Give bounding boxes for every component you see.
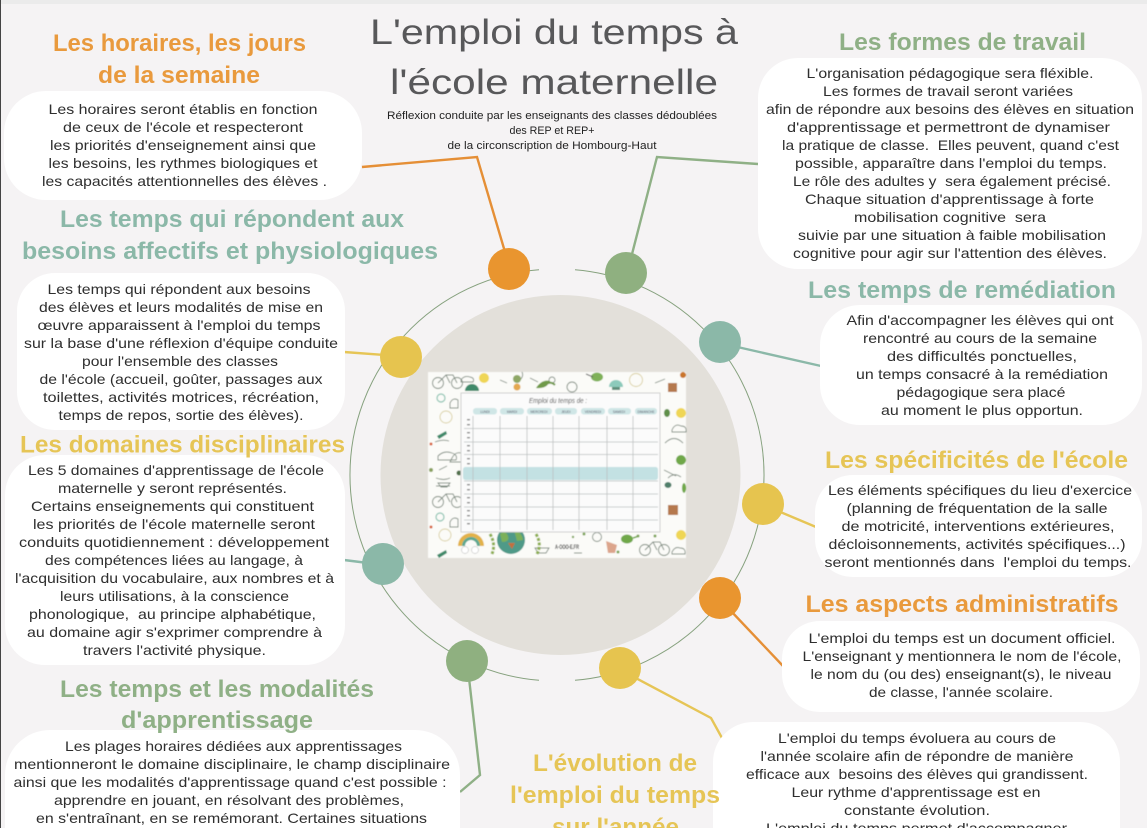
card: domaines (5, 455, 345, 665)
title (370, 13, 739, 102)
text: formes: Le rôle des adultes y sera également précisé. (793, 173, 1111, 189)
heading: domaines: Les domaines disciplinaires (20, 432, 345, 458)
text: domaines (15, 462, 334, 658)
node: teal right (699, 321, 741, 363)
text: formes: possible, apparaître dans l'emploi du temps. (795, 155, 1107, 171)
panel: remédiation (808, 277, 1142, 425)
panel: temps et modalités d'apprentissage (5, 676, 460, 828)
card: besoins (17, 273, 345, 430)
text: remédiation (846, 312, 1114, 418)
text: administratifs: L'emploi du temps est un document officiel. (808, 630, 1116, 646)
ring around the circle (350, 270, 764, 680)
picture: blank timetable: JEUDI (561, 410, 571, 414)
text: horaires: les priorités d'enseignement ainsi que (50, 137, 316, 153)
text: domaines: l'acquisition du vocabulaire, aux nombres et à (15, 570, 334, 586)
text: spécificités: (planning de fréquentation de la salle (846, 500, 1108, 516)
heading: besoins: besoins affectifs et physiologiques (22, 238, 438, 265)
connector: horaires (362, 157, 505, 252)
node: green top (605, 252, 647, 294)
text: évolution: constante évolution. (844, 802, 990, 818)
picture: blank timetable: A-OOO-E.FR (555, 545, 579, 551)
text: domaines: Les 5 domaines d'apprentissage de l'école (28, 462, 324, 478)
picture: blank timetable: SAMEDI (613, 410, 625, 414)
node: orange bottom right (699, 577, 741, 619)
text: horaires: les capacités attentionnelles des élèves . (42, 173, 327, 189)
heading: horaires: Les horaires, les jours (53, 30, 306, 57)
connector: évolution (632, 676, 722, 738)
card: formes (758, 58, 1142, 269)
text: besoins: œuvre apparaissent à l'emploi du temps (38, 317, 320, 333)
text: formes: cognitive pour agir sur l'attention des élèves. (793, 245, 1107, 261)
text: remédiation: Afin d'accompagner les élèves qui ont (846, 312, 1114, 328)
card: évolution (713, 722, 1120, 828)
heading: horaires (53, 30, 306, 89)
beige central circle (380, 295, 740, 655)
panel: aspects administratifs (782, 591, 1140, 712)
card: modalités (5, 730, 460, 828)
heading: formes: Les formes de travail (839, 29, 1086, 56)
panel: horaires (4, 30, 362, 200)
text: remédiation: des difficultés ponctuelles, (887, 348, 1077, 364)
text: besoins: des élèves et leurs modalités de mise en (39, 299, 323, 315)
text: remédiation: rencontré au cours de la semaine (863, 330, 1097, 346)
text: administratifs: le nom du (ou des) enseignant(s), le niveau (810, 666, 1112, 682)
panel: spécificités de l'école (815, 447, 1142, 577)
text: domaines: Certains enseignements qui constituent (31, 498, 314, 514)
connector: modalités (460, 678, 480, 792)
node: yellow left (380, 336, 422, 378)
picture: blank timetable: DIMANCHE (637, 410, 655, 414)
text: spécificités: seront mentionnés dans l'emploi du temps. (824, 554, 1132, 570)
heading: spécificités: Les spécificités de l'école (825, 447, 1128, 474)
picture: blank timetable: MERCREDI (530, 410, 548, 414)
picture: blank timetable: LUNDI (480, 410, 490, 414)
text: administratifs: L'enseignant y mentionnera le nom de l'école, (802, 648, 1122, 664)
text: besoins (24, 281, 338, 423)
heading: horaires: de la semaine (98, 62, 260, 89)
text: besoins: temps de repos, sortie des élèves). (58, 407, 304, 423)
text: spécificités: de motricité, interventions extérieures, (842, 518, 1114, 534)
panel: formes de travail (758, 29, 1142, 269)
connector: formes de travail (631, 157, 758, 258)
heading: remédiation: Les temps de remédiation (808, 277, 1116, 304)
panel: besoins affectifs et physiologiques (17, 206, 438, 430)
connector: besoins (344, 352, 385, 355)
node: teal left (362, 543, 404, 585)
text: spécificités: Les éléments spécifiques du lieu d'exercice (828, 482, 1132, 498)
text: formes: Les formes de travail seront variées (823, 83, 1073, 99)
text: modalités: en s'entraînant, en se remémorant. Certaines situations (36, 810, 427, 826)
text: domaines: les priorités de l'école maternelle seront (33, 516, 315, 532)
heading: évolution: l'emploi du temps (510, 782, 720, 809)
text: domaines: maternelle y seront représentés. (58, 480, 287, 496)
picture: blank timetable: MARDI (507, 410, 517, 414)
text: formes: Chaque situation d'apprentissage à forte (805, 191, 1094, 207)
text: évolution: Leur rythme d'apprentissage est en (792, 784, 1040, 800)
text: remédiation: au moment le plus opportun. (881, 402, 1083, 418)
heading: modalités (60, 676, 374, 734)
heading: modalités: Les temps et les modalités (60, 676, 374, 703)
text: domaines: conduits quotidiennement : développement (19, 534, 329, 550)
connector: domaines (344, 560, 368, 563)
text: formes: suivie par une situation à faible mobilisation (798, 227, 1106, 243)
heading: besoins: Les temps qui répondent aux (60, 206, 405, 233)
text: domaines: phonologique, au principe alphabétique, (29, 606, 316, 622)
text: besoins: toilettes, activités motrices, récréation, (43, 389, 319, 405)
text: administratifs: de classe, l'année scolaire. (869, 684, 1053, 700)
text: formes (766, 65, 1134, 261)
text: besoins: sur la base d'une réflexion d'équipe conduite (24, 335, 338, 351)
text: modalités: apprendre en jouant, en résolvant des problèmes, (54, 792, 404, 808)
subtitle: Réflexion conduite par les enseignants des classes dédoublées (387, 110, 718, 122)
text: administratifs (802, 630, 1122, 700)
text: horaires (42, 101, 327, 189)
node: orange top (488, 248, 530, 290)
text: évolution: L'emploi du temps évoluera au cours de (778, 730, 1056, 746)
title: L'emploi du temps à (370, 13, 739, 52)
heading: évolution: L'évolution de (533, 750, 697, 777)
card: spécificités (815, 475, 1142, 577)
text: modalités: ainsi que les modalités d'apprentissage quand c'est possible : (14, 774, 446, 790)
panel: évolution sur l'année (510, 722, 1120, 828)
text: évolution (746, 730, 1088, 828)
subtitle: des REP et REP+ (510, 125, 594, 137)
card: horaires (4, 91, 362, 200)
heading: modalités: d'apprentissage (121, 707, 313, 734)
connector: spécificités (778, 511, 816, 527)
text: évolution: efficace aux besoins des élèves qui grandissent. (746, 766, 1088, 782)
picture: blank timetable (428, 372, 686, 558)
text: formes: d'apprentissage et permettront de dynamiser (787, 119, 1110, 135)
title: l'école maternelle (390, 63, 718, 102)
panel: domaines disciplinaires (5, 432, 345, 665)
node: yellow bottom (599, 647, 641, 689)
text: besoins: pour l'ensemble des classes (82, 353, 278, 369)
text: modalités (14, 738, 450, 826)
heading: évolution (510, 750, 720, 828)
text: horaires: de ceux de l'école et respecteront (63, 119, 303, 135)
node: yellow right (742, 483, 784, 525)
text: spécificités (824, 482, 1132, 570)
text: domaines: travers l'activité physique. (83, 642, 266, 658)
text: remédiation: pédagogique sera placé (896, 384, 1066, 400)
card: remédiation (820, 305, 1142, 425)
picture: blank timetable: VENDREDI (585, 410, 601, 414)
text: besoins: de l'école (accueil, goûter, passages aux (40, 371, 322, 387)
text: formes: L'organisation pédagogique sera fléxible. (806, 65, 1094, 81)
text: évolution: l'année scolaire afin de répondre de manière (760, 748, 1074, 764)
text: domaines: des compétences liées au langage, à (45, 552, 303, 568)
text: modalités: mentionneront le domaine disciplinaire, le champ disciplinaire (14, 756, 450, 772)
subtitle: de la circonscription de Hombourg-Haut (448, 140, 656, 152)
text: formes: afin de répondre aux besoins des élèves en situation (766, 101, 1134, 117)
heading: besoins (22, 206, 438, 265)
connector: remédiation (733, 346, 821, 366)
card: administratifs (782, 621, 1140, 712)
connector: aspects administratifs (730, 610, 783, 666)
text: domaines: au domaine agir s'exprimer comprendre à (27, 624, 322, 640)
text: formes: mobilisation cognitive sera (854, 209, 1046, 225)
node: green bottom (446, 640, 488, 682)
text: spécificités: décloisonnements, activités spécifiques...) (828, 536, 1126, 552)
text: modalités: Les plages horaires dédiées aux apprentissages (65, 738, 402, 754)
text: domaines: leurs utilisations, à la conscience (60, 588, 289, 604)
text: remédiation: un temps consacré à la remédiation (856, 366, 1108, 382)
text: formes: la pratique de classe. Elles peuvent, quand c'est (782, 137, 1119, 153)
picture: blank timetable: Emploi du temps de : (529, 398, 587, 405)
heading: administratifs: Les aspects administratifs (806, 591, 1118, 618)
subtitle (387, 110, 718, 152)
text: horaires: les besoins, les rythmes biologiques et (48, 155, 318, 171)
text: horaires: Les horaires seront établis en fonction (48, 101, 318, 117)
text: besoins: Les temps qui répondent aux besoins (48, 281, 310, 297)
